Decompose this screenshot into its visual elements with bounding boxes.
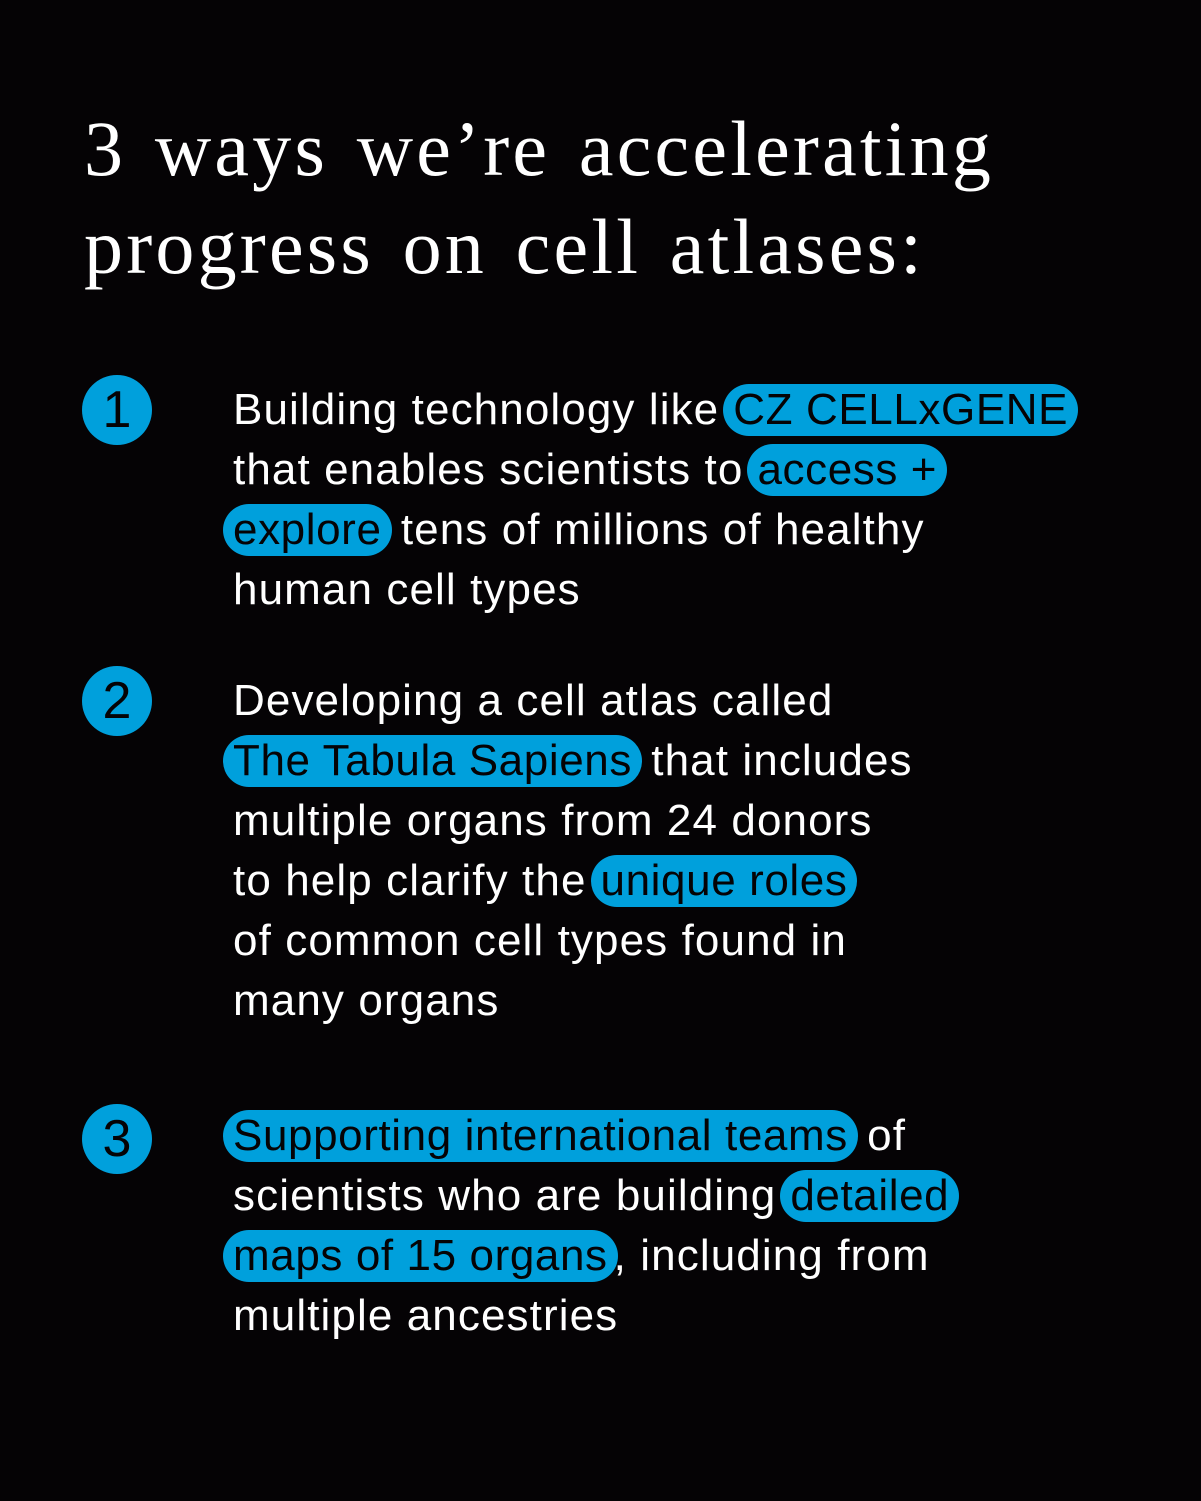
item 3: [82, 1104, 959, 1340]
text: many organs: [233, 976, 499, 1025]
text: maps of 15 organs: [233, 1231, 608, 1280]
text: multiple ancestries: [233, 1291, 618, 1340]
text: The Tabula Sapiens: [233, 736, 632, 785]
text: that enables scientists to: [233, 445, 743, 494]
item 2: [82, 666, 913, 1025]
title: 3 ways we’re accelerating: [84, 105, 994, 192]
text: , including from: [614, 1231, 930, 1280]
text: Developing a cell atlas called: [233, 676, 833, 725]
text: to help clarify the: [233, 856, 587, 905]
text: human cell types: [233, 565, 581, 614]
text: Building technology like: [233, 385, 719, 434]
text: unique roles: [601, 856, 847, 905]
icon: number 3: [82, 1104, 152, 1174]
text: access +: [757, 445, 937, 494]
text: tens of millions of healthy: [401, 505, 925, 554]
icon: number 1: [82, 375, 152, 445]
text: detailed: [790, 1171, 949, 1220]
text: of: [867, 1111, 906, 1160]
text: explore: [233, 505, 382, 554]
icon: number 3: 3: [103, 1110, 131, 1168]
text: that includes: [651, 736, 913, 785]
text block 1: [223, 384, 1078, 614]
text: multiple organs from 24 donors: [233, 796, 873, 845]
text: of common cell types found in: [233, 916, 847, 965]
icon: number 2: 2: [103, 672, 131, 730]
text: CZ CELLxGENE: [733, 385, 1068, 434]
text: Supporting international teams: [233, 1111, 848, 1160]
text block 3: [223, 1110, 959, 1340]
item 1: [82, 375, 1078, 614]
icon: number 2: [82, 666, 152, 736]
text block 2: [223, 676, 913, 1025]
title: progress on cell atlases:: [84, 203, 925, 290]
title: [84, 105, 994, 290]
icon: number 1: 1: [103, 381, 131, 439]
text: scientists who are building: [233, 1171, 776, 1220]
